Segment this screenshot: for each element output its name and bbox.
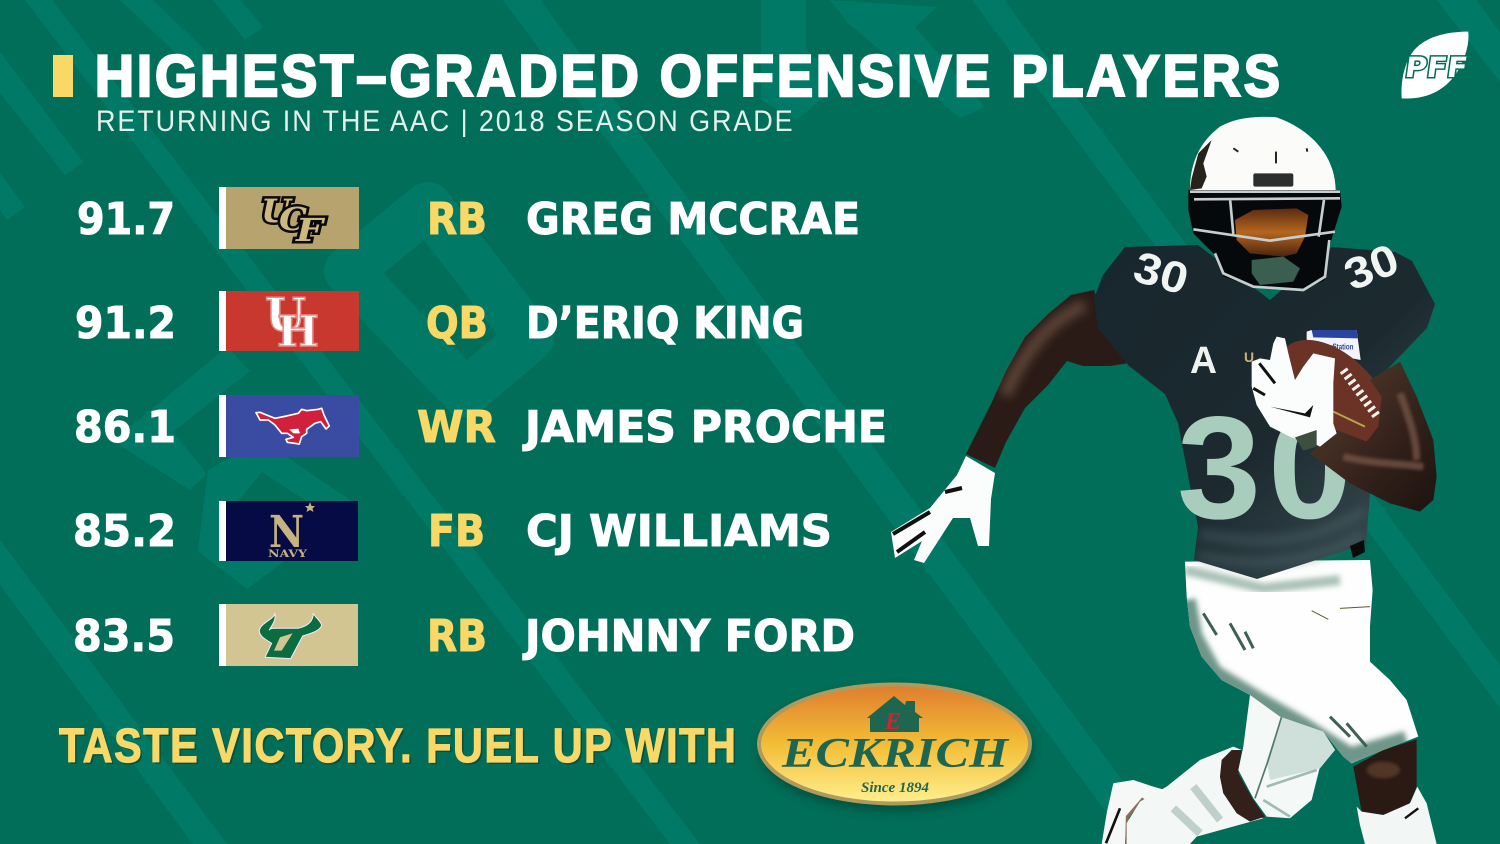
far thigh and knee pad	[1238, 695, 1335, 818]
main pants	[1185, 560, 1418, 763]
face	[1235, 208, 1308, 257]
grade: 83.5	[73, 611, 175, 662]
near sock	[1357, 787, 1437, 844]
team logo: UCF: C	[279, 200, 308, 238]
title text: HIGHEST–GRADED OFFENSIVE PLAYERS	[95, 43, 1280, 108]
team logo: SMU	[219, 395, 359, 457]
conference patch: A	[1190, 340, 1217, 382]
mouthguard	[1252, 257, 1300, 285]
torso	[1094, 235, 1435, 579]
shoulder number right: 30	[1337, 235, 1406, 300]
name: JAMES PROCHE	[522, 402, 887, 453]
position: FB	[428, 506, 485, 557]
team logo: Houston	[219, 288, 359, 356]
team logo: UCF	[219, 187, 359, 249]
team logo: Navy: NAVY	[268, 549, 308, 560]
jersey	[1094, 235, 1435, 579]
title	[53, 43, 1280, 138]
row: CJ Williams	[73, 501, 832, 561]
grade: 91.2	[75, 298, 176, 349]
team logo: UCF: F	[295, 211, 326, 249]
bowl patch	[1307, 330, 1361, 360]
name: GREG MCCRAE	[526, 194, 860, 245]
sponsor logo: Eckrich: Since 1894	[861, 780, 929, 796]
waist tag	[1350, 540, 1365, 558]
name: CJ WILLIAMS	[526, 506, 832, 557]
grade: 91.7	[77, 194, 175, 245]
football	[1258, 320, 1408, 467]
bowl patch: PlayStation	[1320, 342, 1353, 351]
row: D'Eriq King	[75, 288, 804, 356]
position: QB	[426, 298, 488, 349]
player photo illustration	[891, 117, 1437, 844]
right arm	[1310, 362, 1437, 512]
icon: PFF logo	[1401, 32, 1470, 99]
glove on ball	[1252, 337, 1337, 451]
near calf	[1353, 739, 1417, 815]
sponsor tagline: TASTE VICTORY. FUEL UP WITH	[61, 721, 738, 775]
facemask bars	[1190, 192, 1340, 290]
row: Johnny Ford	[73, 604, 855, 666]
jersey number: 3	[1177, 386, 1261, 549]
team logo: Houston: U	[265, 288, 306, 342]
far sock	[1127, 747, 1263, 844]
name: D’ERIQ KING	[526, 298, 804, 349]
sponsor logo: Eckrich: ECKRICH	[781, 731, 1010, 777]
title accent bar	[53, 55, 73, 97]
position: RB	[427, 611, 487, 662]
icon: house: E	[884, 709, 901, 735]
helmet	[1188, 117, 1342, 290]
jersey number	[1177, 386, 1352, 549]
team logo: Navy	[219, 501, 358, 561]
shoulder number left: 30	[1128, 243, 1194, 304]
far calf	[1220, 750, 1265, 822]
row: James Proche	[74, 395, 887, 457]
icon: house	[867, 696, 923, 735]
team logo: USF	[219, 604, 358, 666]
row: Greg McCrae	[77, 187, 860, 249]
sponsor tagline: TASTE VICTORY. FUEL UP WITH	[59, 719, 736, 773]
subtitle: RETURNING IN THE AAC | 2018 SEASON GRADE	[96, 105, 793, 138]
icon: PFF logo: PFF	[1403, 51, 1470, 84]
name: JOHNNY FORD	[522, 611, 855, 662]
left glove	[891, 456, 995, 563]
position: RB	[427, 194, 487, 245]
shoe	[1102, 780, 1165, 844]
left arm	[966, 290, 1129, 468]
team logo: UCF: U	[261, 192, 293, 230]
arm, ball and hand	[1252, 320, 1437, 512]
jersey number: 0	[1268, 386, 1352, 549]
legs and pants	[1102, 560, 1437, 844]
grade: 85.2	[73, 506, 176, 557]
team logo: Navy: N	[269, 507, 304, 558]
grade: 86.1	[74, 402, 176, 453]
team logo: Houston: H	[277, 307, 319, 356]
dome	[1190, 117, 1336, 190]
position: WR	[417, 402, 496, 453]
sponsor logo: Eckrich	[759, 684, 1033, 811]
facemask area	[1188, 190, 1342, 290]
jersey wordmark: U	[1244, 349, 1254, 365]
